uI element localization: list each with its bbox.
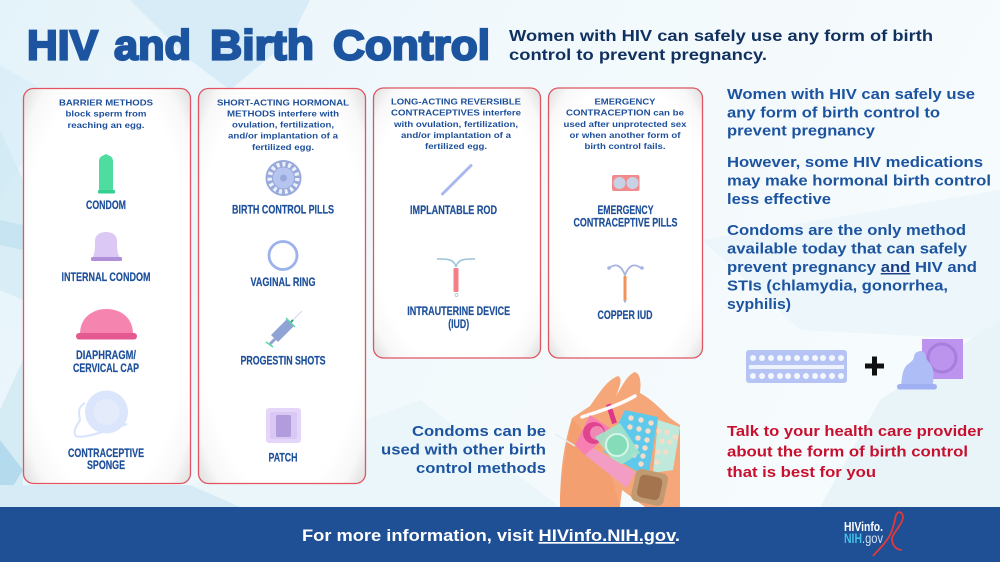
icon: internal condom	[91, 232, 122, 261]
panel: barrier methods	[24, 88, 190, 484]
label: condom: CONDOM	[86, 198, 126, 212]
panel heading: long-acting reversible	[391, 96, 522, 151]
text: condoms with other methods	[381, 424, 546, 477]
text: condoms with other methods: used with other birth	[381, 442, 546, 458]
title: and	[114, 22, 191, 68]
label: intrauterine device: (IUD)	[448, 317, 469, 331]
sub: plus sign	[865, 356, 884, 376]
text: condoms with other methods: control methods	[416, 461, 546, 477]
sub: syringe	[555, 434, 635, 488]
sub: condom wrapper	[922, 339, 963, 379]
label: emergency contraceptive pills: EMERGENCY	[598, 203, 654, 217]
label: emergency contraceptive pills	[574, 203, 678, 230]
panel heading: short-acting hormonal: fertilized egg.	[252, 142, 314, 152]
text block: hormonal interactions: may make hormonal birth control	[727, 174, 991, 190]
text block: hiv and birth control: prevent pregnancy	[727, 124, 876, 140]
text block: talk to your provider: about the form of birth control	[727, 444, 968, 460]
text block: talk to your provider: Talk to your health care provider	[727, 424, 983, 440]
subtitle	[509, 28, 933, 64]
icon: implantable rod	[442, 166, 471, 194]
text block: hormonal interactions: However, some HIV medications	[727, 155, 983, 171]
sub: pill pack	[746, 350, 847, 383]
sub: condom	[897, 351, 937, 390]
panel heading: emergency contraception: or when another form of	[570, 130, 681, 140]
logo: HIVinfo.NIH.gov: NIH	[844, 530, 862, 546]
label: contraceptive sponge: SPONGE	[87, 458, 125, 472]
panel heading: short-acting hormonal: SHORT-ACTING HORMONAL	[217, 98, 349, 108]
label: emergency contraceptive pills: CONTRACEPTIVE PILLS	[574, 216, 678, 230]
text block: hiv and birth control: Women with HIV can safely use	[727, 87, 975, 103]
panel heading: emergency contraception: used after unprotected sex	[564, 119, 687, 129]
sub: iud	[582, 396, 635, 424]
panel heading: barrier methods: BARRIER METHODS	[59, 98, 154, 108]
panel: emergency contraception	[548, 88, 702, 358]
text block: hormonal interactions	[727, 155, 991, 208]
icon: contraceptive sponge	[75, 390, 128, 437]
text block: hormonal interactions: less effective	[727, 192, 831, 208]
text block: condoms: available today that can safely	[727, 242, 968, 258]
label: birth control pills: BIRTH CONTROL PILLS	[232, 202, 334, 216]
panel heading: barrier methods: block sperm from	[66, 108, 146, 118]
title: Control	[333, 22, 490, 68]
panel heading: long-acting reversible: with ovulation, fertilization,	[393, 119, 518, 129]
label: patch: PATCH	[268, 450, 298, 464]
title: HIV	[27, 22, 98, 68]
panel: long-acting reversible contraceptives	[374, 88, 540, 358]
sub: green condom packet	[595, 423, 640, 467]
text block: condoms	[727, 223, 977, 313]
label: intrauterine device	[407, 304, 510, 331]
text block: talk to your provider: that is best for you	[727, 465, 876, 481]
icon: patch	[266, 408, 301, 443]
label: progestin shots: PROGESTIN SHOTS	[240, 354, 326, 368]
icon: condom	[98, 154, 115, 194]
text block: talk to your provider	[727, 424, 983, 481]
panel heading: short-acting hormonal: ovulation, fertilization,	[232, 120, 334, 130]
icon: progestin syringe	[266, 311, 302, 347]
panel: short-acting hormonal methods	[198, 88, 366, 484]
panel heading: barrier methods	[59, 98, 154, 130]
label: copper iud: COPPER IUD	[598, 308, 653, 322]
panel heading: short-acting hormonal: METHODS interfere with	[227, 108, 339, 118]
icon: intrauterine device	[437, 259, 475, 296]
title: Birth	[210, 22, 314, 68]
panel heading: long-acting reversible: fertilized egg.	[425, 141, 487, 151]
icon: diaphragm	[76, 309, 137, 340]
text block: hiv and birth control: any form of birth control to	[727, 106, 940, 122]
icon: vaginal ring	[269, 242, 297, 270]
label: diaphragm / cervical cap	[73, 348, 139, 375]
illustration: hands holding birth control	[555, 372, 680, 507]
text block: condoms: Condoms are the only method	[727, 223, 966, 239]
label: contraceptive sponge	[68, 446, 144, 472]
footer text: For more information, visit HIVinfo.NIH.gov .	[302, 526, 680, 545]
icon: pill pack plus condom	[746, 339, 963, 390]
icon: emergency contraceptive pills	[612, 175, 640, 191]
panel heading: emergency contraception: birth control fails.	[584, 141, 666, 151]
panel heading: emergency contraception: EMERGENCY	[594, 96, 656, 106]
text block: hiv and birth control	[727, 87, 975, 140]
logo: HIVinfo.NIH.gov	[844, 512, 903, 556]
label: vaginal ring: VAGINAL RING	[250, 275, 316, 289]
logo: HIVinfo.NIH.gov: .gov	[862, 530, 883, 546]
label: intrauterine device: INTRAUTERINE DEVICE	[407, 304, 510, 318]
sub: condom wrapper	[575, 415, 610, 457]
title	[27, 22, 490, 68]
label: internal condom: INTERNAL CONDOM	[62, 270, 150, 284]
label: implantable rod: IMPLANTABLE ROD	[410, 203, 497, 217]
panel heading: long-acting reversible: LONG-ACTING REVERSIBLE	[391, 96, 522, 106]
text block: condoms: STIs (chlamydia, gonorrhea,	[727, 278, 948, 294]
subtitle: Women with HIV can safely use any form of birth	[509, 28, 933, 45]
sub: brown patch	[630, 468, 669, 507]
label: diaphragm / cervical cap: DIAPHRAGM/	[76, 348, 136, 362]
icon: birth control pills	[266, 160, 302, 196]
sub: pill packs	[604, 410, 680, 478]
label: diaphragm / cervical cap: CERVICAL CAP	[73, 361, 139, 375]
panel heading: long-acting reversible: CONTRACEPTIVES interfere	[391, 108, 521, 118]
panel heading: short-acting hormonal	[217, 98, 349, 152]
text block: condoms: syphilis)	[727, 297, 791, 313]
footer band	[0, 507, 1000, 562]
icon: copper iud	[607, 265, 644, 302]
subtitle: control to prevent pregnancy.	[509, 47, 767, 64]
panel heading: barrier methods: reaching an egg.	[68, 120, 144, 130]
panel heading: emergency contraception: CONTRACEPTION can be	[566, 108, 684, 118]
label: contraceptive sponge: CONTRACEPTIVE	[68, 446, 144, 460]
logo: HIVinfo.NIH.gov: HIVinfo.	[844, 519, 883, 534]
text: condoms with other methods: Condoms can be	[412, 424, 546, 440]
text block: condoms: prevent pregnancy and HIV and	[727, 260, 977, 276]
panel heading: short-acting hormonal: and/or implantation of a	[228, 130, 338, 140]
panel heading: emergency contraception	[564, 96, 687, 151]
panel heading: long-acting reversible: and/or implantation of a	[401, 130, 511, 140]
